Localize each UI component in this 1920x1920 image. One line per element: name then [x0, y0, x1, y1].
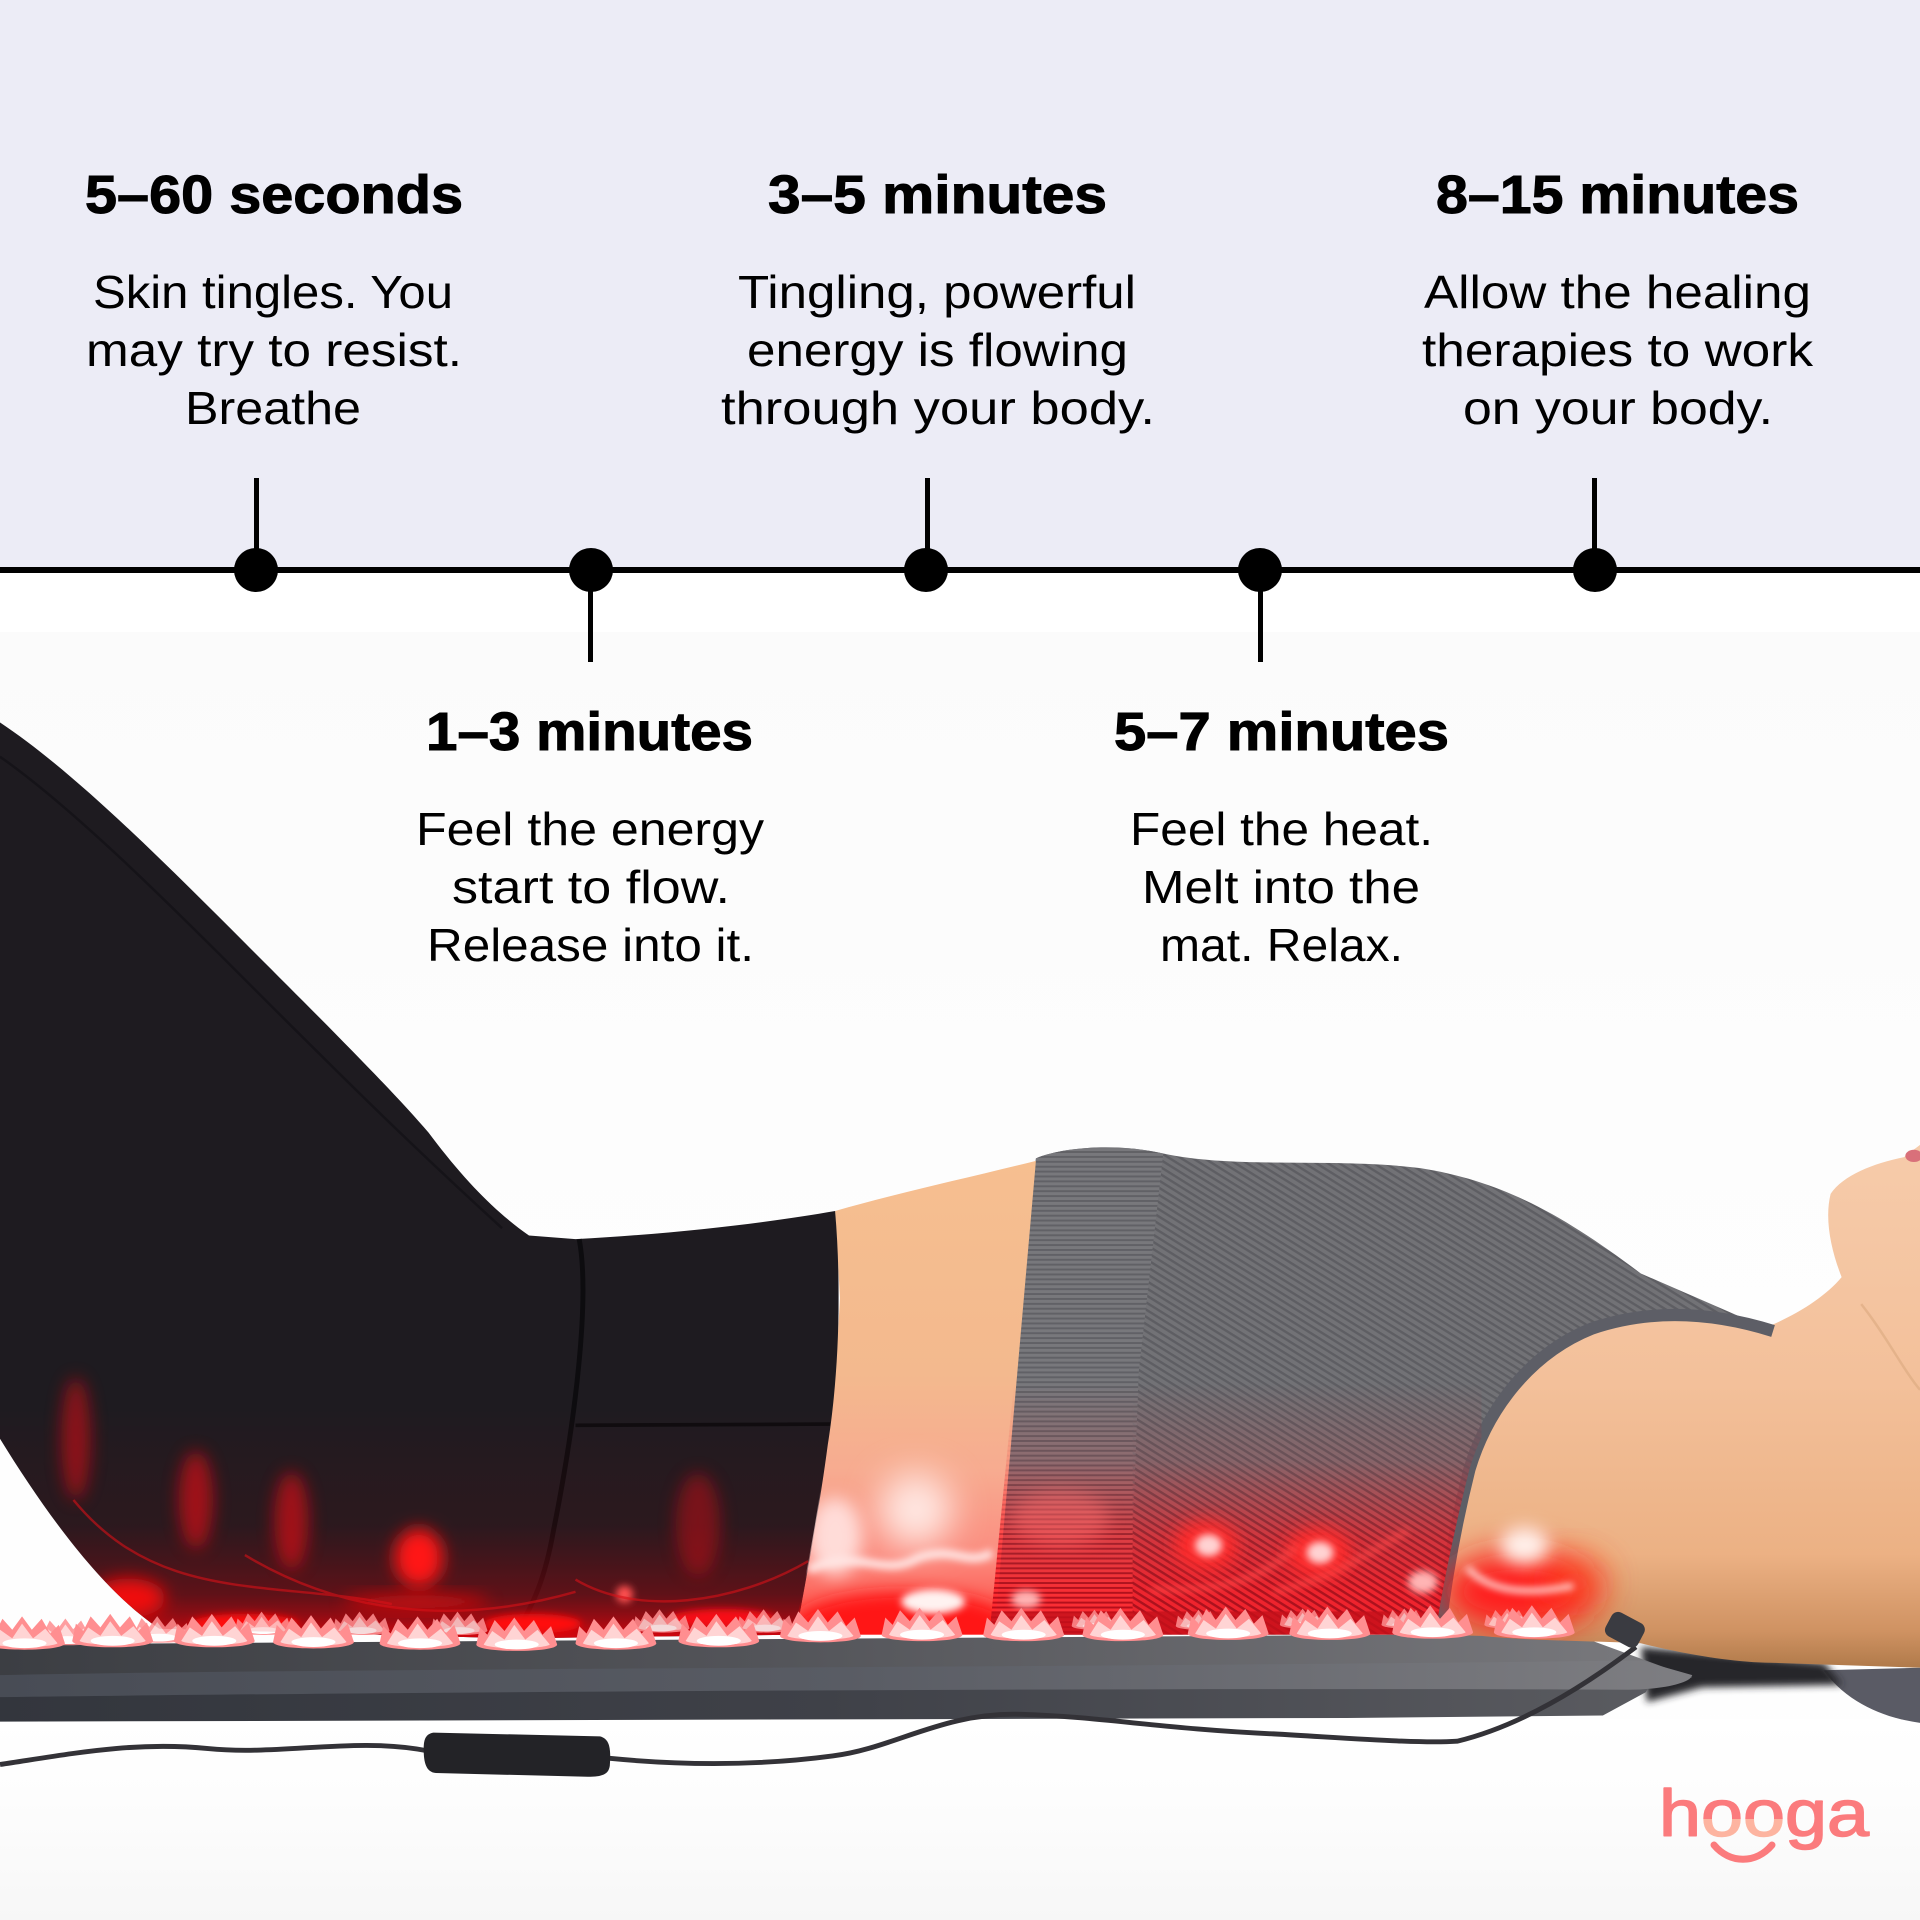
logo smile [1714, 1845, 1772, 1859]
red glow on top [990, 1406, 1482, 1635]
crease between neck and arm [1861, 1304, 1920, 1390]
marker 4 [1238, 548, 1282, 662]
heading: 1–3 minutes [426, 702, 753, 762]
marker 5 [1573, 478, 1617, 592]
description: through your body. [721, 382, 1155, 434]
red lit knit [991, 1406, 1482, 1635]
back leg shading [0, 757, 502, 1228]
heading: 8–15 minutes [1436, 165, 1799, 225]
lower photo background [0, 632, 1920, 1920]
mat [0, 1633, 1692, 1722]
description: energy is flowing [747, 324, 1128, 376]
rear row of nodes [35, 1608, 1533, 1645]
logo wordmark: hooga [1659, 1776, 1869, 1850]
hooga logo [1659, 1776, 1869, 1859]
heading: 5–7 minutes [1114, 702, 1449, 762]
acupressure light nodes [0, 1605, 1575, 1651]
step: 5-7 minutes [1114, 702, 1449, 971]
description: Allow the healing [1424, 266, 1811, 318]
heading: 5–60 seconds [85, 165, 463, 225]
power cable [0, 1647, 1636, 1764]
description [416, 803, 764, 971]
description: Release into it. [427, 919, 754, 971]
floor [0, 1719, 1920, 1920]
leggings pocket seam [576, 1424, 830, 1425]
legging fill [0, 716, 857, 1641]
leggings side seam [520, 1239, 583, 1626]
description [721, 266, 1155, 434]
description [86, 266, 462, 434]
red glow on leggings [0, 1378, 857, 1641]
description [1422, 266, 1814, 434]
inline controller [424, 1733, 610, 1777]
front row of nodes [0, 1605, 1575, 1651]
step: 3-5 minutes [721, 165, 1155, 434]
marker 2 [569, 548, 613, 662]
description [1130, 803, 1433, 971]
description: mat. Relax. [1160, 919, 1403, 971]
grey sports top [980, 1139, 1788, 1641]
step: 8-15 minutes [1422, 165, 1814, 434]
marker 1 [234, 478, 278, 592]
timeline axis [0, 567, 1920, 573]
shadow beneath arm [1641, 1647, 1843, 1702]
red glow on arm [1442, 1527, 1605, 1631]
cable connector [1602, 1609, 1647, 1650]
description: Tingling, powerful [738, 266, 1136, 318]
description: Feel the energy [416, 803, 764, 855]
lavender header panel [0, 0, 1920, 570]
towel under head [1823, 1668, 1920, 1723]
mat side [0, 1680, 1653, 1722]
knit body [1036, 1148, 1738, 1635]
neckline binding [1440, 1315, 1773, 1629]
photo: woman lying on red light mat [0, 722, 1920, 1777]
bare midriff [784, 1157, 1041, 1641]
marker 3 [904, 478, 948, 592]
description: Melt into the [1142, 861, 1420, 913]
heading: 3–5 minutes [768, 165, 1107, 225]
description: Breathe [185, 382, 361, 434]
step: 1-3 minutes [416, 702, 764, 971]
ribbed hem band [989, 1147, 1163, 1635]
arm and neck [1420, 1139, 1920, 1678]
mat piping seam [0, 1660, 1692, 1697]
lips [1905, 1150, 1920, 1162]
description: therapies to work [1422, 324, 1814, 376]
red glow on midriff [798, 1455, 997, 1635]
description: on your body. [1463, 382, 1773, 434]
description: may try to resist. [86, 324, 462, 376]
description: Skin tingles. You [93, 266, 453, 318]
black leggings [0, 716, 857, 1641]
timeline [0, 478, 1920, 662]
description: start to flow. [452, 861, 730, 913]
step: 5-60 seconds [85, 165, 463, 434]
mat top surface [0, 1633, 1692, 1680]
description: Feel the heat. [1130, 803, 1433, 855]
neck, shoulder and arm skin [1420, 1139, 1920, 1678]
